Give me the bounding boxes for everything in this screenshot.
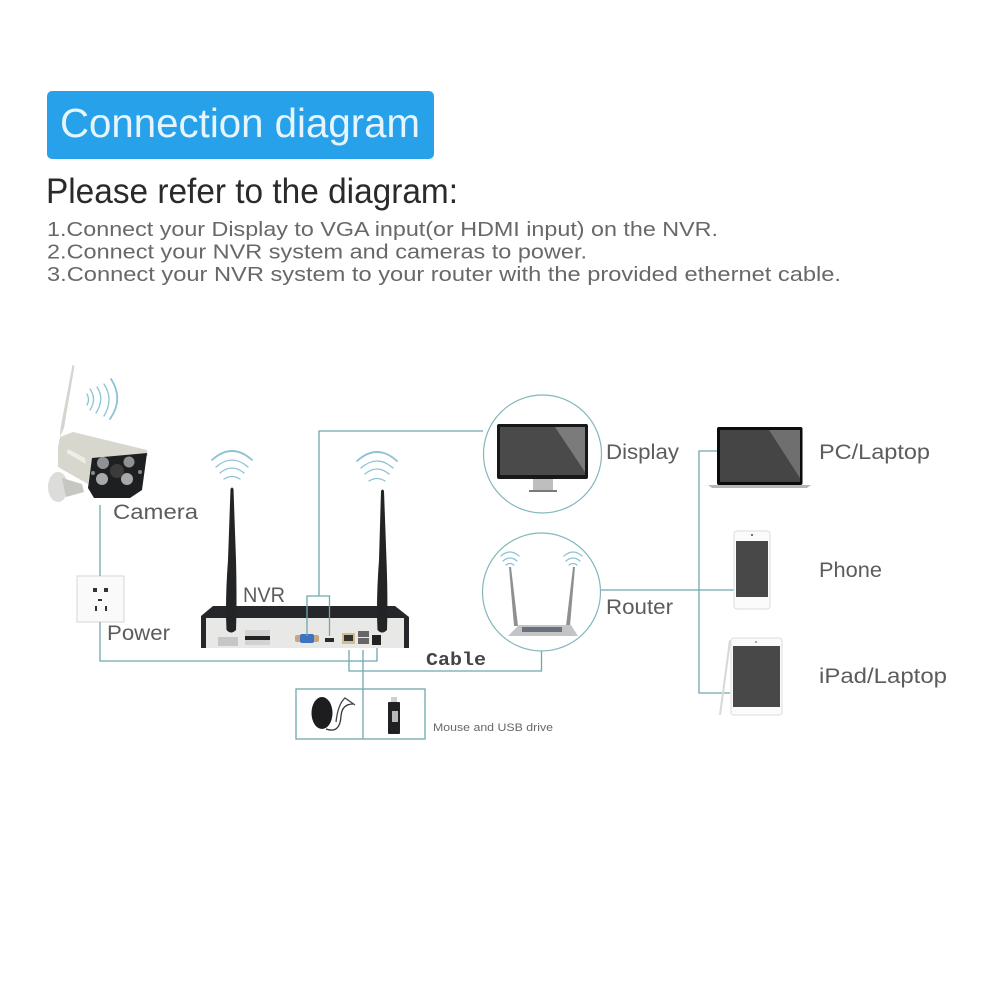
label: PC/Laptop: PC/Laptop [819, 441, 930, 464]
icon: router wifi signal [501, 552, 582, 565]
icon: NVR right antenna [357, 452, 397, 632]
subheading: Please refer to the diagram: [46, 172, 458, 211]
icon: NVR left antenna [212, 451, 252, 632]
icon: camera wifi signal [87, 379, 117, 419]
instructions text: 2.Connect your NVR system and cameras to power. [47, 240, 587, 264]
icon: mouse [312, 697, 355, 730]
label: Power: Power [107, 622, 170, 645]
panel: display circle [484, 395, 602, 513]
instructions text: 1.Connect your Display to VGA input(or HDMI input) on the NVR. [47, 218, 718, 241]
icon: camera [48, 365, 148, 502]
icon: phone [734, 531, 770, 609]
title banner: Connection diagram [60, 100, 420, 146]
icon: left antenna wifi signal [212, 451, 252, 479]
icon: NVR recorder [201, 606, 409, 648]
icon: right antenna wifi signal [357, 452, 397, 481]
title banner [47, 91, 434, 159]
label: NVR: NVR [243, 584, 285, 607]
instructions text: 3.Connect your NVR system to your router with the provided ethernet cable. [47, 263, 841, 286]
label: Camera: Camera [113, 501, 198, 524]
icon: laptop [708, 427, 811, 488]
label: Router: Router [606, 596, 673, 619]
label: Display: Display [606, 441, 680, 464]
panel: router circle [482, 533, 600, 651]
label: iPad/Laptop: iPad/Laptop [819, 665, 947, 688]
instructions text [47, 218, 841, 286]
panel: mouse and USB drive box [296, 689, 425, 739]
icon: tablet [719, 638, 782, 715]
label: Cable: Cable [426, 651, 486, 671]
icon: power socket [77, 576, 124, 622]
connection lines [100, 431, 734, 739]
icon: USB drive [388, 697, 400, 734]
label: Phone: Phone [819, 559, 882, 582]
label: Mouse and USB drive: Mouse and USB drive [433, 722, 553, 734]
